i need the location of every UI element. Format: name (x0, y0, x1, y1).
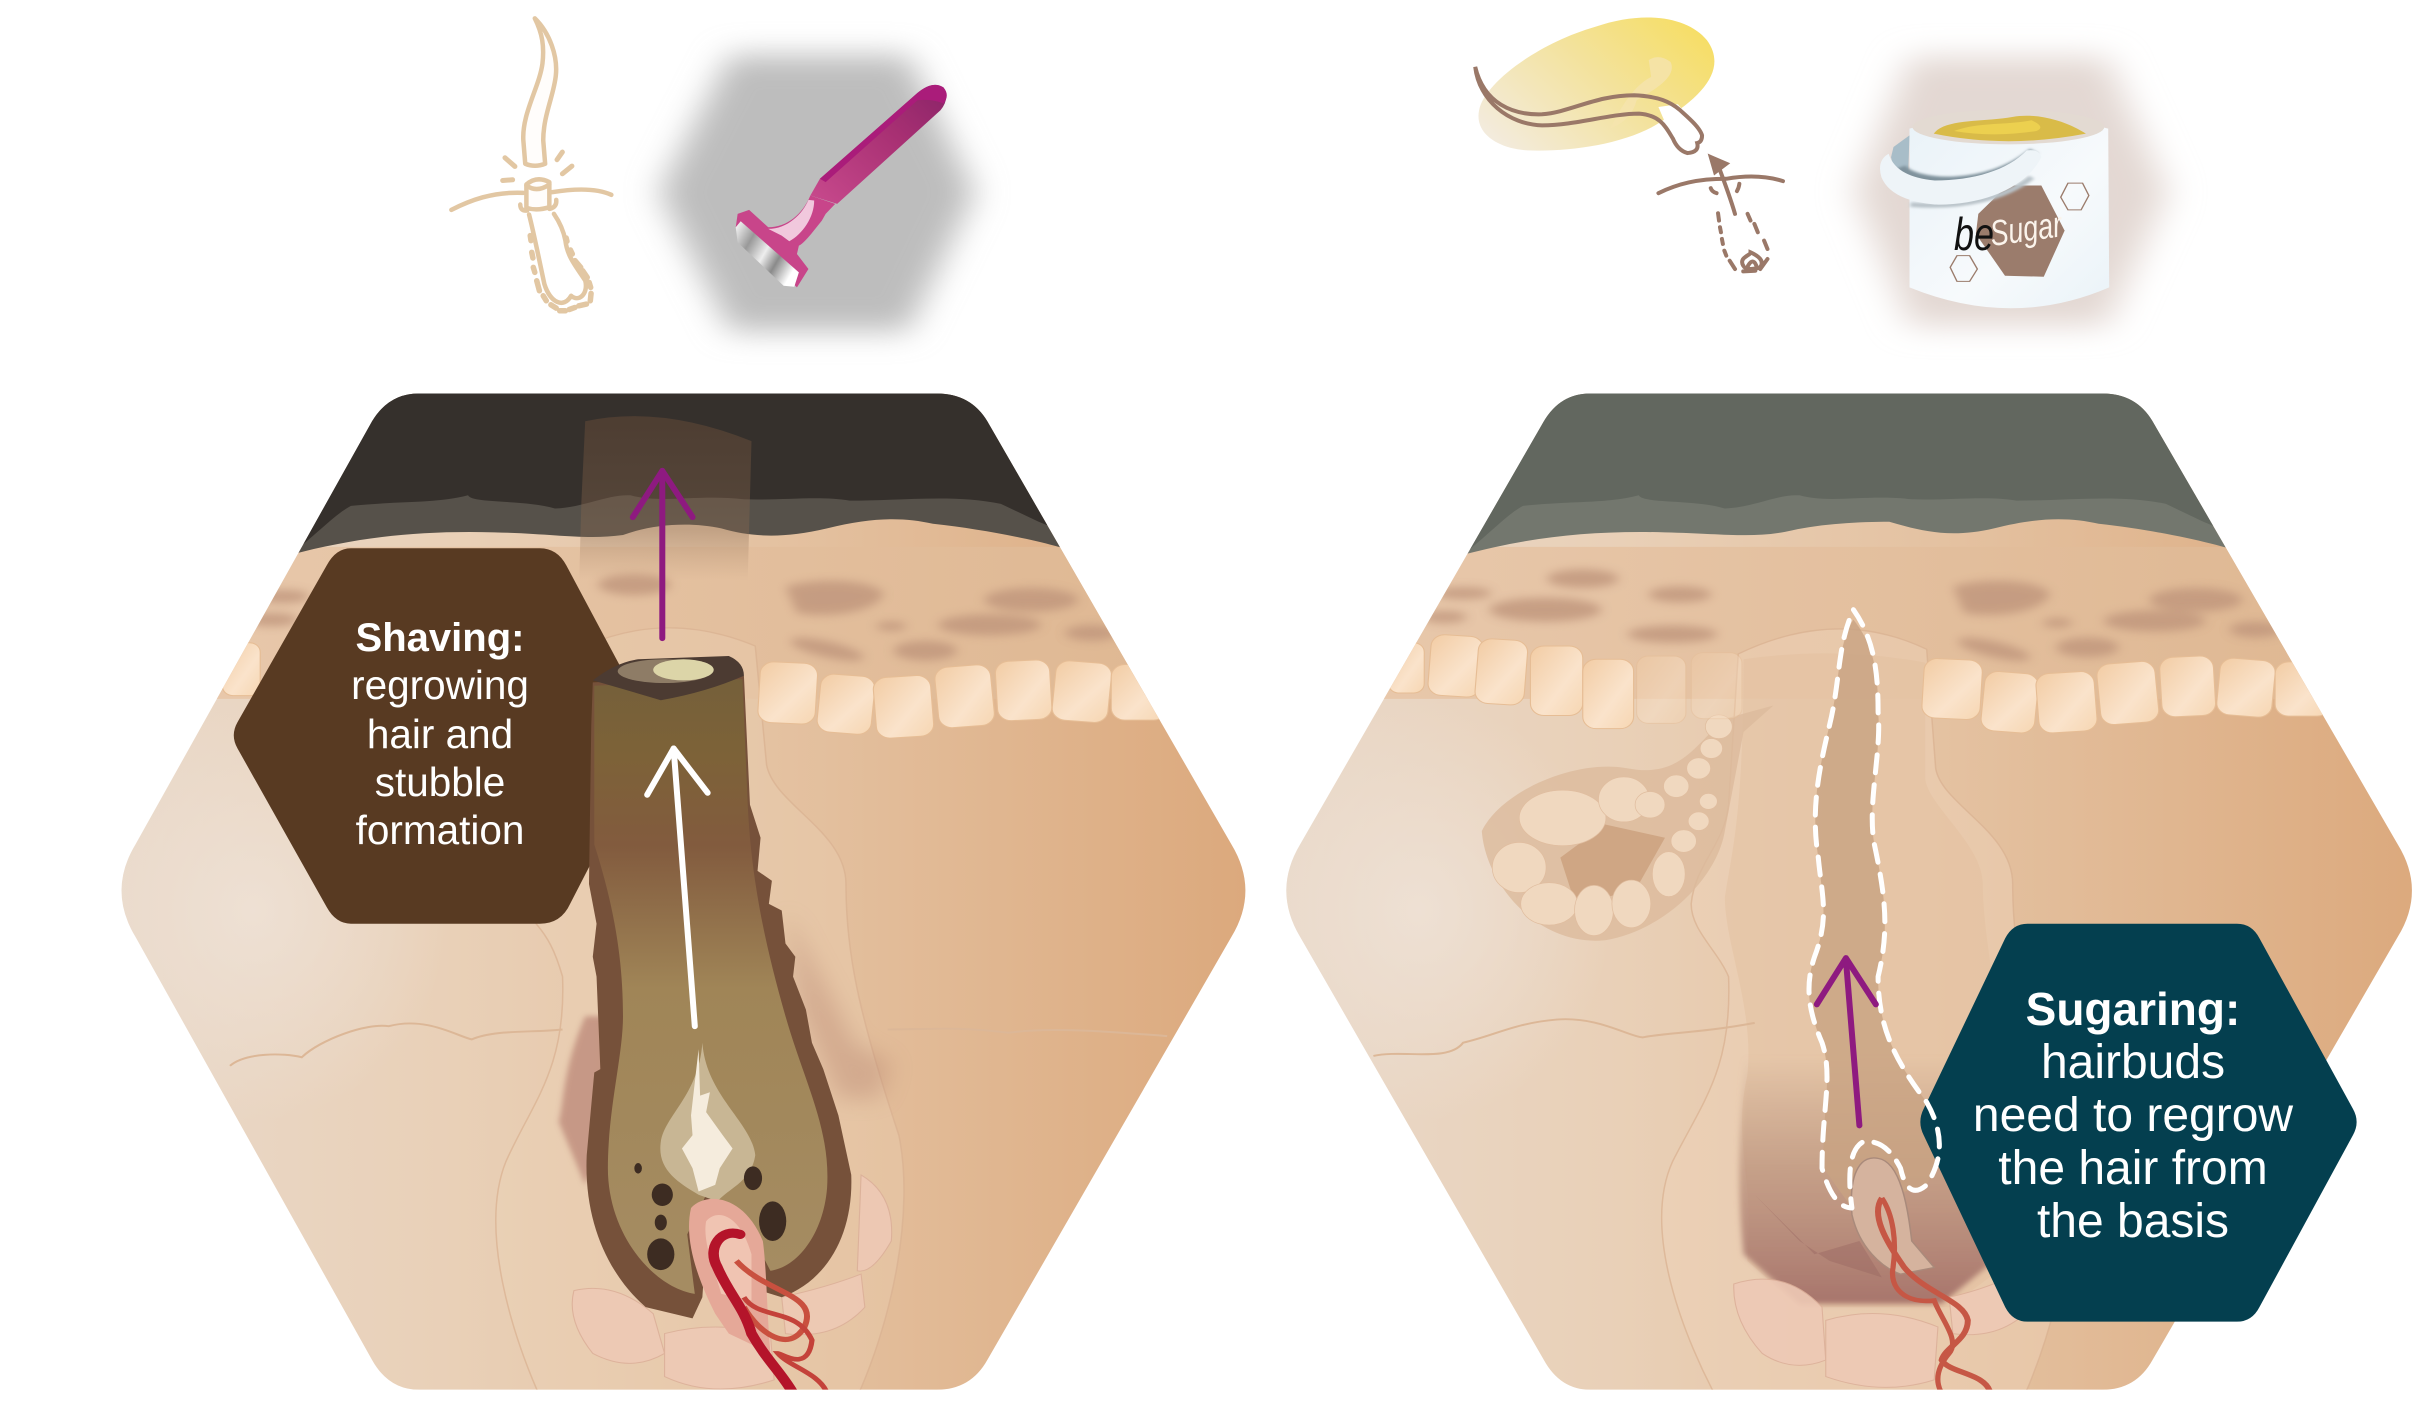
cell row (1388, 634, 2330, 734)
follicle (1662, 629, 2070, 1410)
blood vessels (736, 1261, 807, 1339)
icon: hair pulled out with wax (1475, 17, 1783, 271)
stratum band (298, 394, 1060, 553)
shade around follicle (556, 1014, 600, 1184)
stratum band (1468, 394, 2226, 554)
epidermis blobs (1422, 569, 2282, 666)
callout: Shaving: Shaving: (356, 616, 524, 660)
callout: Sugaring: hairbuds (2041, 1036, 2225, 1089)
ghost hair removed (579, 416, 751, 580)
callout: Shaving: formation (356, 807, 524, 853)
dermis wavy line (230, 1023, 1167, 1066)
callout: Sugaring: the hair from (1998, 1142, 2268, 1195)
epidermis blobs (245, 574, 1118, 666)
callout: Shaving: stubble (375, 759, 505, 805)
fat cells (572, 1175, 892, 1389)
callout: Sugaring: need to regrow (1973, 1089, 2293, 1142)
panel: sugaring skin cross-section (1224, 382, 2436, 1410)
jar label: be: be (1954, 208, 1994, 260)
hair shaft and bulb (586, 676, 851, 1318)
hair bud (1851, 1158, 1934, 1274)
jar label: Sugar: Sugar (1987, 203, 2066, 254)
callout: Sugaring: the basis (2037, 1195, 2229, 1248)
panel: shaving skin cross-section (122, 394, 1246, 1390)
icon: shaved hair diagram (451, 18, 611, 311)
Shaving hexagon background (234, 548, 657, 924)
arrow: white regrowth (647, 749, 708, 1026)
icon: sugar paste jar (1855, 57, 2167, 326)
dermis wavy line (1373, 1019, 1755, 1056)
callout: Shaving: regrowing (351, 662, 529, 708)
stratum corneum (1470, 394, 2214, 549)
callout: Sugaring (1973, 983, 2293, 1248)
hair ghost fill (1809, 620, 1937, 1208)
dashed hair outline (1809, 610, 1939, 1208)
fat cells (1733, 1278, 2018, 1388)
icon: razor on grey hexagon (659, 55, 975, 331)
callout: Shaving: hair and (367, 711, 513, 757)
vessels (1878, 1198, 1990, 1393)
arrow: purple sugaring (1817, 958, 1876, 1125)
cell row (222, 643, 1167, 739)
papilla (689, 1199, 770, 1353)
Sugaring hexagon background (1920, 924, 2357, 1322)
callout: Sugaring: Sugaring: (2026, 983, 2240, 1035)
follicle outline (496, 628, 904, 1410)
arrow: purple shaving (633, 471, 693, 638)
stratum corneum (303, 394, 1048, 544)
pits (634, 1163, 786, 1270)
callout: Shaving (351, 616, 529, 853)
sebaceous gland (1482, 706, 1773, 941)
follicle inner shade (1725, 699, 1834, 1270)
hair cut top (593, 656, 744, 700)
